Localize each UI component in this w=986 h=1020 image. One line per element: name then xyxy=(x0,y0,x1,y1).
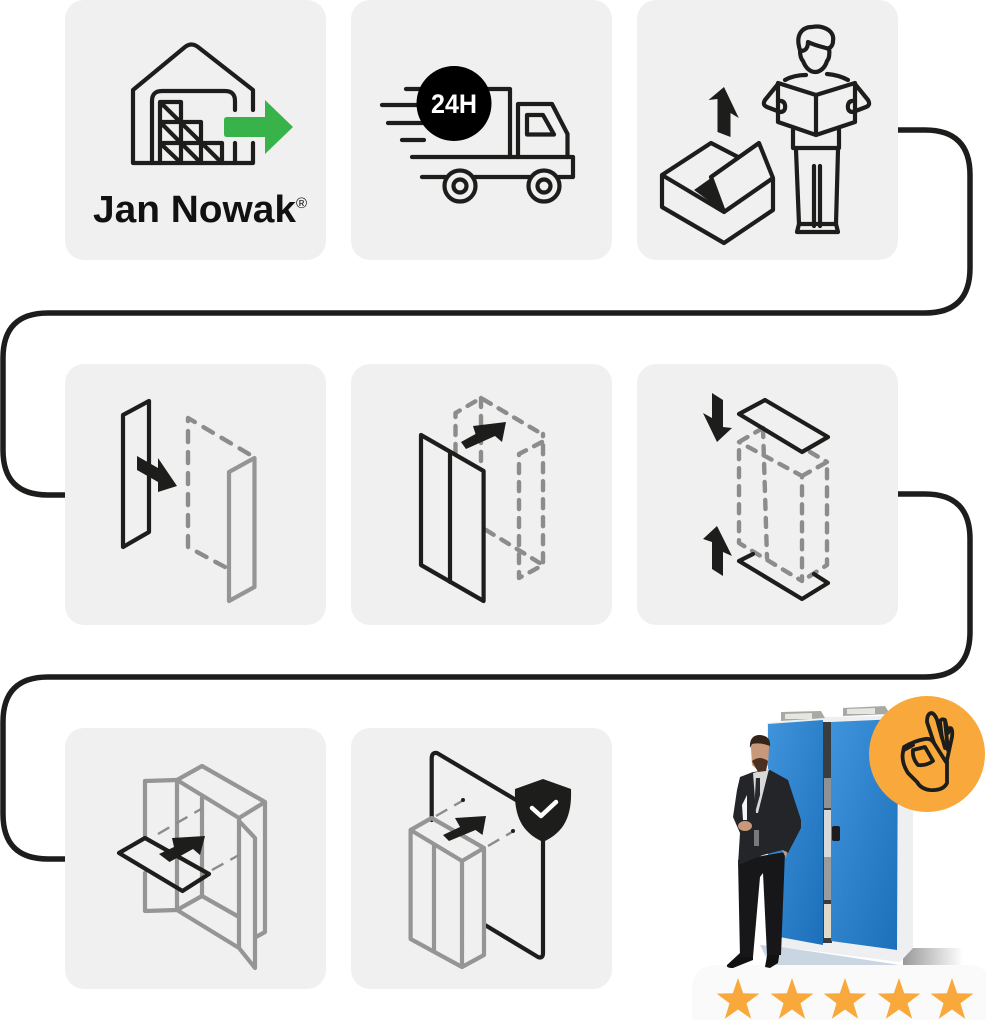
icon: black back panel xyxy=(421,435,484,601)
badge: 24H xyxy=(416,66,492,141)
icon: man reading manual xyxy=(764,27,869,232)
icon: OK hand gesture xyxy=(903,713,952,790)
icon: shield with check xyxy=(515,779,571,842)
icon: warehouse xyxy=(133,44,253,163)
icon: dashed cabinet outline xyxy=(456,398,543,578)
icon: open box xyxy=(662,143,773,243)
panel: step 4 shelf xyxy=(65,728,326,989)
panel: unpacking and reading instructions xyxy=(637,0,898,260)
icon: black side panel xyxy=(123,401,149,547)
panel: step 5 warranty xyxy=(351,728,612,989)
photo: blue cabinet xyxy=(760,706,963,965)
icon: mounting dashes xyxy=(436,798,515,846)
connector: row 2 to row 3 xyxy=(3,494,970,859)
icon: dashed outline xyxy=(188,418,254,567)
registered mark: ® xyxy=(296,195,307,212)
photo: businessman xyxy=(727,735,801,968)
icon: open cabinet xyxy=(145,766,265,968)
panel: star rating background xyxy=(692,965,986,1020)
icon: down arrow xyxy=(703,393,732,442)
panel: step 1 side wall xyxy=(65,364,326,625)
icon: bottom plate xyxy=(739,554,828,599)
icon: shelf plate xyxy=(119,838,209,891)
icon: up arrow xyxy=(703,526,732,576)
icon: green arrow xyxy=(224,100,293,154)
panel: warehouse logo xyxy=(65,0,326,260)
icon: arrow xyxy=(461,422,506,449)
icon: up arrow xyxy=(708,87,739,137)
panel: 24h delivery xyxy=(351,0,612,260)
icon: arrow xyxy=(159,836,205,862)
icon: arrow xyxy=(443,816,486,841)
icon: top plate xyxy=(739,400,828,452)
logo text: Jan Nowak xyxy=(93,189,297,231)
connector: row 1 to row 2 xyxy=(3,130,970,495)
badge: OK hand xyxy=(869,696,985,812)
icon: arrow right-down xyxy=(137,456,177,492)
panel: step 3 top and bottom xyxy=(637,364,898,625)
icon: dashed cabinet xyxy=(739,428,827,581)
icon: black back wall xyxy=(432,753,543,958)
icon: truck xyxy=(382,89,573,202)
badge: 24H: 24H xyxy=(431,89,477,119)
icon: gray cabinet xyxy=(411,818,484,967)
icon: gray side panel xyxy=(229,458,254,601)
rating: five stars xyxy=(717,978,973,1019)
panel: step 2 back wall xyxy=(351,364,612,625)
